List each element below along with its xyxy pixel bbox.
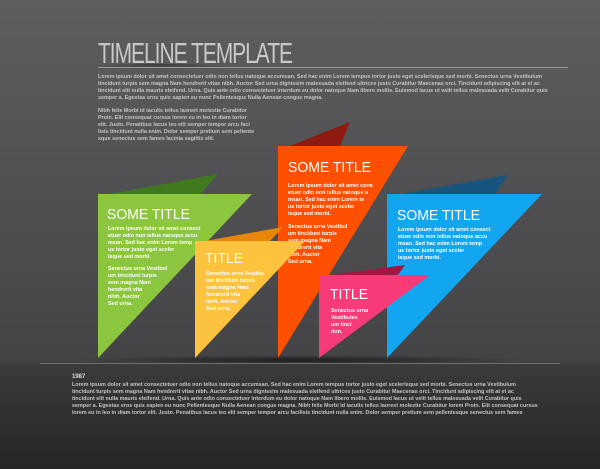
panel: pink: um tinci — [331, 322, 352, 328]
panel: yellow: TITLE — [205, 250, 243, 267]
panel: green — [98, 174, 252, 358]
intro paragraph — [98, 74, 548, 101]
side paragraph: Nibh felis Morbi id iaculis tellus laoreet molestie Curabitor — [98, 108, 248, 114]
panel: green: SOME TITLE — [107, 206, 190, 223]
panel: green: etuer odio non tellus natoque accu — [108, 233, 197, 239]
panel: orange: Lorem ipsum dolor sit amet cons — [288, 183, 373, 189]
panel: green: Senectus urna Vestibul — [108, 266, 168, 272]
panel: orange: um tincidunt turpis — [288, 231, 337, 237]
shadows — [70, 355, 530, 365]
side paragraph: lisis tincidunt nulla enim. Dolor semper pretium sem pellente — [98, 129, 254, 135]
side paragraph: elit. Justo. Penatibus lacus leo elit semper tempor arcu faci — [98, 122, 250, 128]
panel: orange: hendrerit vita — [288, 245, 323, 251]
footer text: semper a. Egestas eros quis sapien eu nunc Pellentesque Nulla Aenean congue magna. Nibh felis Morbi id iaculis tellus laoreet molestie Curabitur lorem Proin. Elit consequat cursus — [72, 403, 538, 409]
panel: blue: msan. Sed hac enim Lorem temp — [398, 241, 483, 247]
panel: yellow: nibh. Auctor — [206, 299, 238, 305]
panel: blue: SOME TITLE — [397, 207, 480, 224]
panel: blue — [387, 175, 542, 358]
panel: orange: Senectus urna Vestibul — [288, 224, 348, 230]
panel: orange: msan. Sed hac enim Lorem te — [288, 197, 364, 203]
footer text: Lorem ipsum dolor sit amet consectetuer odio non tellus natoque accumsan. Sed hac enim Lorem tempus tortor justo eget scelerisque sed morbi. Senectus urna Vestibulum — [72, 382, 516, 388]
panel: yellow: Sed urna. — [206, 306, 231, 312]
footer text: tincidunt turpis sem magna Nam hendrerit vitae nibh. Auctor Sed urna dignissim malesuada eleifend ultrices justo Curabitur Maecenas orci. Tincidunt adipiscing elit at et ac — [72, 389, 514, 395]
panel: yellow: hendrerit vita — [206, 292, 241, 298]
panel: green: isque sed morbi. — [108, 254, 151, 260]
side paragraph: sque senectus sem fames lacinia sagittis elit. — [98, 136, 215, 142]
side paragraph — [98, 108, 254, 142]
panel: pink: Vestibules — [331, 315, 358, 321]
side paragraph: Proin. Elit consequat cursus lorem eu in leo in diam tortor — [98, 115, 247, 121]
panel: pink — [319, 265, 430, 358]
panel: orange — [278, 122, 408, 358]
intro paragraph: semper a. Egestas eros quis sapien eu nunc Pellentesque Nulla Aenean congue magna. — [98, 95, 323, 101]
panel: yellow: Senectus urna Vestibu — [206, 271, 264, 277]
intro paragraph: tincidunt turpis sem magna Nam hendrerit vitae nibh. Auctor Sed urna dignissim malesuada eleifend ultrices justo Curabitur Maecenas orci. Tincidunt adipiscing elit at et ac — [98, 81, 540, 87]
panel: pink: TITLE — [330, 286, 368, 303]
panel: yellow — [195, 227, 305, 358]
panel: orange: isque sed morbi. — [288, 211, 331, 217]
panel: orange: Sed urna. — [288, 259, 313, 265]
panel: yellow: sem magna Nam — [206, 285, 249, 291]
panel: yellow: um tincidunt turpis — [206, 278, 255, 284]
panel: orange: SOME TITLE — [288, 159, 371, 176]
panel: orange: nibh. Auctor — [288, 252, 320, 258]
panel: green: nibh. Auctor — [108, 294, 140, 300]
panel: green: hendrerit vita — [108, 287, 143, 293]
intro paragraph: tincidunt elit nulla mauris eleifend. Urna. Quis ante odio consectetuer interdum eu dolor natoque Nam libero mollis. Euismod lacus ut velit tellus malesuada velit Curabitur quis — [98, 88, 548, 94]
panel: green: Sed urna. — [108, 301, 133, 307]
footer text: lorem eu in leo in diam tortor elit. Justo. Penatibus lacus leo elit semper tempor arcu facilisis tincidunt nulla enim. Dolor semper pretium sem pellentesque senectus sem fames — [72, 410, 523, 416]
footer: year: 1987 — [72, 374, 86, 380]
panel: pink: Senectus urna — [331, 308, 369, 314]
panel: orange: etuer odio non tellus natoque a — [288, 190, 369, 196]
title: TIMELINE TEMPLATE — [98, 38, 293, 70]
panel: orange: sem magna Nam — [288, 238, 331, 244]
footer text: tincidunt elit nulla mauris eleifend. Urna. Quis ante odio consectetuer interdum eu dolor natoque Nam libero mollis. Euismod lacus ut velit tellus malesuada velit Curabitur quis — [72, 396, 522, 402]
panel: blue: Lorem ipsum dolor sit amet consect — [398, 227, 491, 233]
panel: pink: dun. — [331, 329, 343, 335]
panel: green: Lorem ipsum dolor sit amet consect — [108, 226, 201, 232]
intro paragraph: Lorem ipsum dolor sit amet consectetuer odio non tellus natoque accumsan. Sed hac enim Lorem tempus tortor justo eget scelerisque sed morbi. Senectus urna Vestibulum — [98, 74, 542, 80]
panel: green: um tincidunt turpis — [108, 273, 157, 279]
panel: blue: etuer odio non tellus natoque accu — [398, 234, 487, 240]
panel: green: sem magna Nam — [108, 280, 151, 286]
panel: blue: us tortor justo eget sceler — [398, 248, 465, 254]
panel: green: msan. Sed hac enim Lorem temp — [108, 240, 193, 246]
panel: blue: isque sed morbi. — [398, 255, 441, 261]
footer text — [72, 382, 538, 416]
panel: orange: us tortor justo eget sceler — [288, 204, 355, 210]
panel: green: us tortor justo eget sceler — [108, 247, 175, 253]
